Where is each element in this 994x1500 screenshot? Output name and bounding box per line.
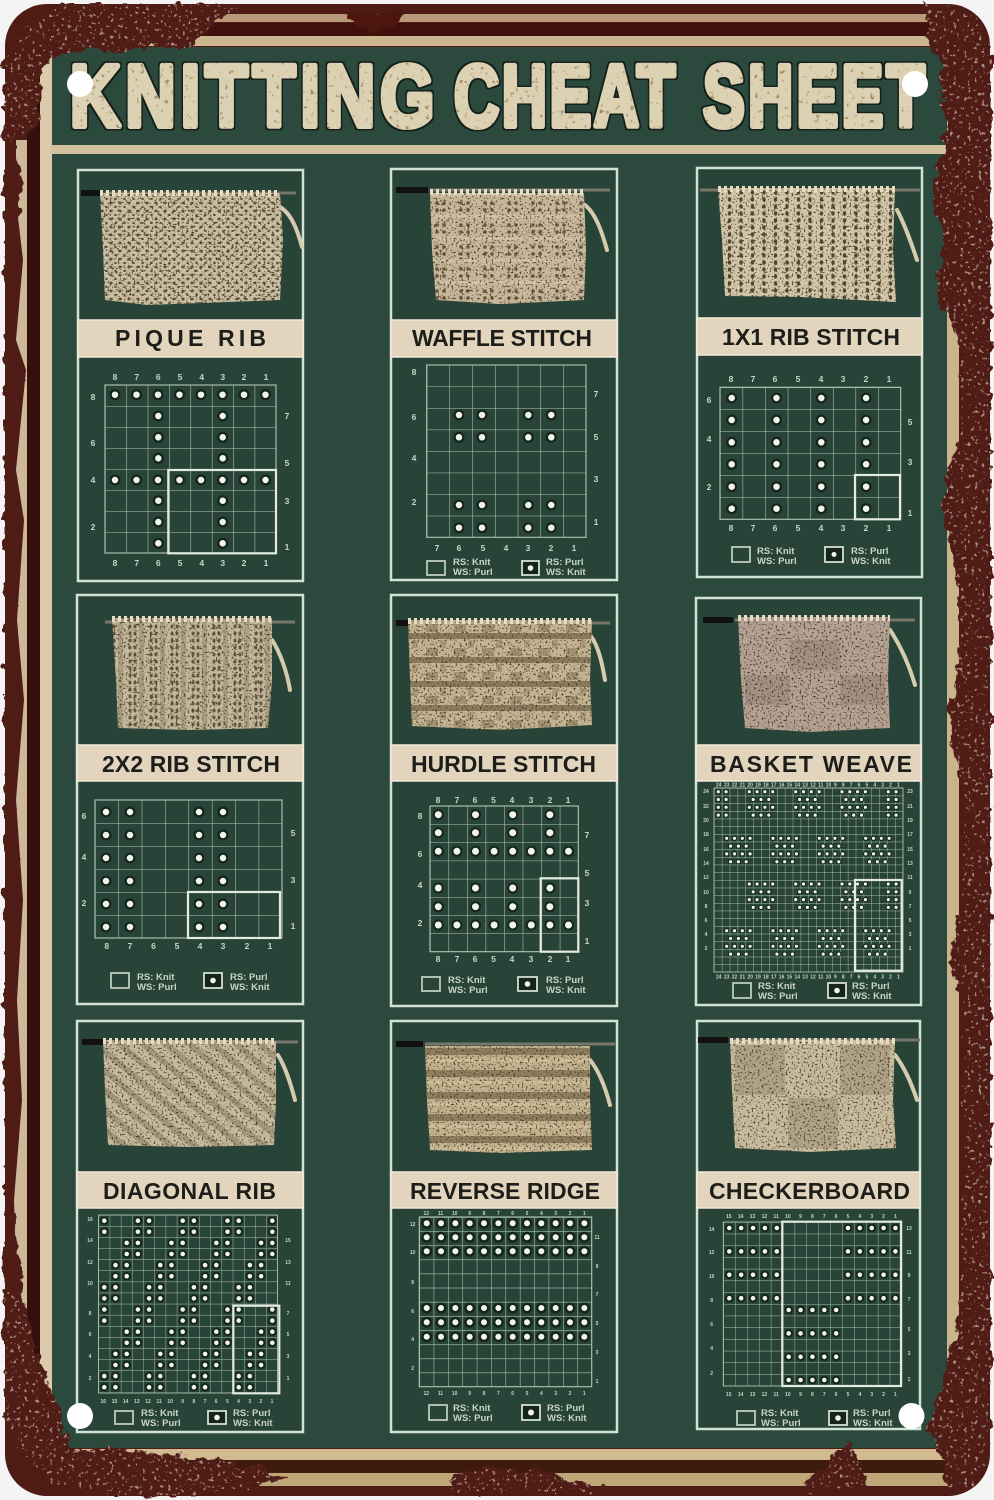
- title: KNITTING: [70, 48, 440, 145]
- mounting holes: [67, 71, 928, 1429]
- stitch chart: checkerboard: 9: [908, 1273, 911, 1279]
- panel: 1x1 rib stitch: [697, 168, 922, 577]
- stitch chart: reverse ridge: 12 11 10: [424, 1391, 458, 1397]
- legend: 1x1 rib stitch: WS: Knit: [851, 556, 891, 567]
- stitch chart: basket weave: 10: [703, 890, 709, 896]
- legend: diagonal rib: WS: Knit: [233, 1418, 273, 1429]
- stitch chart: waffle stitch: [412, 365, 599, 553]
- stitch chart: basket weave: 8: [705, 904, 708, 910]
- stitch chart: diagonal rib: 3: [287, 1354, 290, 1360]
- stitch chart: basket weave: 7: [909, 904, 912, 910]
- stitch chart: diagonal rib: 16 15 14 13 12 11 10: [100, 1399, 173, 1405]
- stitch chart: basket weave: 21: [907, 804, 913, 810]
- swatch photo: 1x1 rib stitch: [700, 188, 920, 302]
- stitch chart: waffle stitch: 7531: [594, 389, 599, 527]
- stitch chart: pique rib: 8642: [91, 392, 96, 532]
- panel: basket weave: [696, 598, 921, 1005]
- stitch chart: diagonal rib: 7: [287, 1311, 290, 1317]
- stitch chart: 2x2 rib stitch: 531: [291, 828, 296, 931]
- stitch chart: reverse ridge: 9 8 7 6 5 4 3 2 1: [468, 1211, 586, 1217]
- legend: 2x2 rib stitch: RS: Purl: [230, 972, 267, 983]
- stitch chart: basket weave: 15: [907, 847, 913, 853]
- stitch chart: diagonal rib: 9 8 7 6 5 4 3 2 1: [181, 1399, 274, 1405]
- legend: diagonal rib: RS: Purl: [233, 1408, 270, 1419]
- stitch chart: checkerboard: 13: [906, 1226, 912, 1232]
- legend: reverse ridge: RS: Knit: [453, 1403, 491, 1414]
- panel: diagonal rib: [77, 1021, 303, 1432]
- stitch chart: basket weave: 9 8 7 6 5 4 3 2 1: [834, 974, 900, 980]
- legend: basket weave: WS: Knit: [852, 991, 892, 1002]
- stitch chart: checkerboard: 2: [710, 1371, 713, 1377]
- title: CHEAT: [454, 48, 678, 146]
- legend: basket weave: WS: Purl: [758, 991, 798, 1002]
- stitch chart: basket weave: 16: [703, 847, 709, 853]
- stitch chart: checkerboard: [709, 1214, 912, 1398]
- stitch chart: waffle stitch: 8642: [412, 367, 417, 507]
- legend: 2x2 rib stitch: WS: Knit: [230, 982, 270, 993]
- title: SHEET: [703, 48, 928, 146]
- stitch chart: diagonal rib: 10: [87, 1281, 93, 1287]
- stitch chart: checkerboard: 5: [908, 1327, 911, 1333]
- legend: hurdle stitch: WS: Purl: [448, 985, 488, 996]
- legend: hurdle stitch: RS: Purl: [546, 975, 583, 986]
- legend: 1x1 rib stitch: RS: Knit: [757, 546, 795, 557]
- legend: 1x1 rib stitch: [732, 546, 891, 567]
- stitch chart: diagonal rib: 14: [87, 1238, 93, 1244]
- legend: diagonal rib: RS: Knit: [141, 1408, 179, 1419]
- stitch chart: reverse ridge: 1: [596, 1379, 599, 1385]
- stitch chart: basket weave: 11: [907, 875, 913, 881]
- panel: checkerboard: [697, 1021, 920, 1429]
- legend: diagonal rib: [115, 1408, 273, 1429]
- stitch chart: basket weave: 17: [907, 832, 913, 838]
- stitch chart: basket weave: 24: [703, 789, 709, 795]
- panel: 2x2 rib stitch: [77, 595, 303, 1004]
- stitch chart: basket weave: 24 23 22 21 20 19 18 17 16 15 14 13 12 11 10: [716, 974, 831, 980]
- stitch chart: hurdle stitch: 8642: [418, 811, 423, 928]
- legend: reverse ridge: [429, 1403, 587, 1424]
- stitch chart: reverse ridge: 4: [411, 1337, 414, 1343]
- legend: checkerboard: RS: Purl: [853, 1408, 890, 1419]
- stitch chart: reverse ridge: 12 11 10: [424, 1211, 458, 1217]
- stitch chart: hurdle stitch: 87654321: [436, 954, 571, 964]
- stitch chart: reverse ridge: 6: [411, 1309, 414, 1315]
- legend: waffle stitch: WS: Knit: [546, 567, 586, 578]
- label: hurdle stitch: HURDLE STITCH: [411, 751, 596, 777]
- label: waffle stitch: WAFFLE STITCH: [412, 325, 592, 351]
- stitch chart: checkerboard: 9 8 7 6 5 4 3 2 1: [799, 1214, 897, 1220]
- label: 1x1 rib stitch: 1X1 RIB STITCH: [722, 324, 900, 350]
- stitch chart: reverse ridge: 10: [410, 1250, 416, 1256]
- stitch chart: basket weave: 22: [703, 804, 709, 810]
- stitch chart: checkerboard: 8: [710, 1298, 713, 1304]
- stitch chart: basket weave: 9: [909, 890, 912, 896]
- stitch chart: 1x1 rib stitch: 87654321: [729, 523, 892, 533]
- stitch chart: reverse ridge: 5: [596, 1321, 599, 1327]
- legend: 2x2 rib stitch: WS: Purl: [137, 982, 177, 993]
- stitch chart: basket weave: 23: [907, 789, 913, 795]
- stitch chart: basket weave: 5: [909, 918, 912, 924]
- swatch photo: pique rib: [81, 193, 302, 305]
- stitch chart: basket weave: 18: [703, 832, 709, 838]
- stitch chart: basket weave: 3: [909, 932, 912, 938]
- legend: 1x1 rib stitch: RS: Purl: [851, 546, 888, 557]
- swatch photo: checkerboard: [698, 1040, 920, 1152]
- stitch chart: diagonal rib: 16: [87, 1217, 93, 1223]
- stitch chart: 1x1 rib stitch: 87654321: [729, 374, 892, 384]
- stitch chart: waffle stitch: 7654321: [435, 543, 577, 553]
- stitch chart: reverse ridge: 9: [596, 1264, 599, 1270]
- label: basket weave: BASKET WEAVE: [710, 751, 912, 777]
- legend: waffle stitch: WS: Purl: [453, 567, 493, 578]
- stitch chart: reverse ridge: 9 8 7 6 5 4 3 2 1: [468, 1391, 586, 1397]
- stitch chart: checkerboard: 9 8 7 6 5 4 3 2 1: [799, 1392, 897, 1398]
- stitch chart: reverse ridge: 2: [411, 1366, 414, 1372]
- legend: waffle stitch: RS: Knit: [453, 557, 491, 568]
- stitch chart: reverse ridge: 8: [411, 1280, 414, 1286]
- panel: reverse ridge: [391, 1021, 617, 1432]
- legend: 1x1 rib stitch: WS: Purl: [757, 556, 797, 567]
- legend: checkerboard: WS: Purl: [761, 1418, 801, 1429]
- stitch chart: checkerboard: 6: [710, 1322, 713, 1328]
- stitch chart: basket weave: [703, 782, 913, 980]
- label: diagonal rib: DIAGONAL RIB: [103, 1178, 276, 1204]
- legend: basket weave: RS: Purl: [852, 981, 889, 992]
- legend: basket weave: RS: Knit: [758, 981, 796, 992]
- legend: waffle stitch: [427, 557, 586, 578]
- panel: waffle stitch: [391, 169, 617, 580]
- swatch photo: 2x2 rib stitch: [105, 618, 295, 730]
- stitch chart: 2x2 rib stitch: 642: [82, 811, 87, 908]
- stitch chart: reverse ridge: [410, 1211, 600, 1397]
- stitch chart: basket weave: 20: [703, 818, 709, 824]
- stitch chart: diagonal rib: 13: [285, 1260, 291, 1266]
- stitch chart: basket weave: 9 8 7 6 5 4 3 2 1: [834, 782, 900, 788]
- label: checkerboard: CHECKERBOARD: [709, 1178, 910, 1204]
- stitch chart: reverse ridge: 11: [594, 1235, 600, 1241]
- panel: pique rib: [78, 170, 303, 581]
- stitch chart: checkerboard: 15 14 13 12 11 10: [726, 1392, 791, 1398]
- legend: checkerboard: RS: Knit: [761, 1408, 799, 1419]
- stitch chart: diagonal rib: 5: [287, 1332, 290, 1338]
- swatch photo: reverse ridge: [396, 1044, 615, 1153]
- legend: checkerboard: [737, 1408, 893, 1429]
- stitch chart: pique rib: [91, 372, 290, 568]
- stitch chart: checkerboard: 4: [710, 1346, 713, 1352]
- stitch chart: diagonal rib: 4: [89, 1354, 92, 1360]
- legend: diagonal rib: WS: Purl: [141, 1418, 181, 1429]
- legend: reverse ridge: WS: Purl: [453, 1413, 493, 1424]
- stitch chart: diagonal rib: 1: [287, 1376, 290, 1382]
- stitch chart: basket weave: 2: [705, 946, 708, 952]
- stitch chart: pique rib: 87654321: [113, 372, 269, 382]
- label: reverse ridge: REVERSE RIDGE: [410, 1178, 600, 1204]
- panel: hurdle stitch: [391, 595, 617, 1006]
- stitch chart: checkerboard: 3: [908, 1351, 911, 1357]
- swatch photo: hurdle stitch: [396, 620, 610, 730]
- stitch chart: basket weave: 6: [705, 918, 708, 924]
- title: [70, 48, 928, 146]
- stitch chart: basket weave: 1: [909, 946, 912, 952]
- stitch chart: hurdle stitch: 87654321: [436, 795, 571, 805]
- stitch chart: hurdle stitch: [418, 795, 590, 964]
- stitch chart: basket weave: 13: [907, 861, 913, 867]
- stitch chart: pique rib: 7531: [285, 411, 290, 552]
- stitch chart: diagonal rib: 12: [87, 1260, 93, 1266]
- label: pique rib: PIQUE RIB: [115, 325, 266, 351]
- stitch chart: 1x1 rib stitch: 531: [908, 417, 913, 518]
- stitch chart: checkerboard: 1: [908, 1377, 911, 1383]
- stitch chart: checkerboard: 11: [906, 1250, 912, 1256]
- stitch chart: 1x1 rib stitch: 642: [707, 395, 712, 492]
- swatch photo: waffle stitch: [396, 190, 610, 304]
- stitch chart: basket weave: 4: [705, 932, 708, 938]
- legend: reverse ridge: RS: Purl: [547, 1403, 584, 1414]
- legend: hurdle stitch: WS: Knit: [546, 985, 586, 996]
- stitch chart: 2x2 rib stitch: [82, 800, 296, 951]
- legend: checkerboard: WS: Knit: [853, 1418, 893, 1429]
- stitch chart: checkerboard: 12: [709, 1250, 715, 1256]
- stitch chart: basket weave: 12: [703, 875, 709, 881]
- legend: hurdle stitch: [422, 975, 586, 996]
- stitch chart: reverse ridge: 3: [596, 1350, 599, 1356]
- legend: reverse ridge: WS: Knit: [547, 1413, 587, 1424]
- legend: 2x2 rib stitch: RS: Knit: [137, 972, 175, 983]
- stitch chart: checkerboard: 7: [908, 1297, 911, 1303]
- stitch chart: pique rib: 87654321: [113, 558, 269, 568]
- stitch chart: reverse ridge: 12: [410, 1222, 416, 1228]
- stitch chart: diagonal rib: 15: [285, 1238, 291, 1244]
- stitch chart: 1x1 rib stitch: [707, 374, 913, 533]
- legend: hurdle stitch: RS: Knit: [448, 975, 486, 986]
- stitch chart: diagonal rib: 8: [89, 1311, 92, 1317]
- stitch chart: checkerboard: 10: [709, 1274, 715, 1280]
- stitch chart: checkerboard: 14: [709, 1227, 715, 1233]
- stitch chart: basket weave: 14: [703, 861, 709, 867]
- label: 2x2 rib stitch: 2X2 RIB STITCH: [102, 751, 280, 777]
- stitch chart: hurdle stitch: 7531: [585, 830, 590, 946]
- swatch photo: basket weave: [703, 617, 915, 732]
- legend: 2x2 rib stitch: [111, 972, 270, 993]
- stitch chart: basket weave: 24 23 22 21 20 19 18 17 16 15 14 13 12 11 10: [716, 782, 831, 788]
- stitch chart: diagonal rib: [87, 1215, 291, 1405]
- stitch chart: diagonal rib: 2: [89, 1376, 92, 1382]
- stitch chart: diagonal rib: 6: [89, 1332, 92, 1338]
- stitch chart: reverse ridge: 7: [596, 1292, 599, 1298]
- stitch chart: basket weave: 19: [907, 818, 913, 824]
- legend: basket weave: [733, 981, 892, 1002]
- stitch chart: checkerboard: 15 14 13 12 11 10: [726, 1214, 791, 1220]
- swatch photo: diagonal rib: [82, 1040, 298, 1147]
- legend: waffle stitch: RS: Purl: [546, 557, 583, 568]
- stitch chart: diagonal rib: 11: [285, 1281, 291, 1287]
- stitch chart: 2x2 rib stitch: 87654321: [104, 941, 273, 951]
